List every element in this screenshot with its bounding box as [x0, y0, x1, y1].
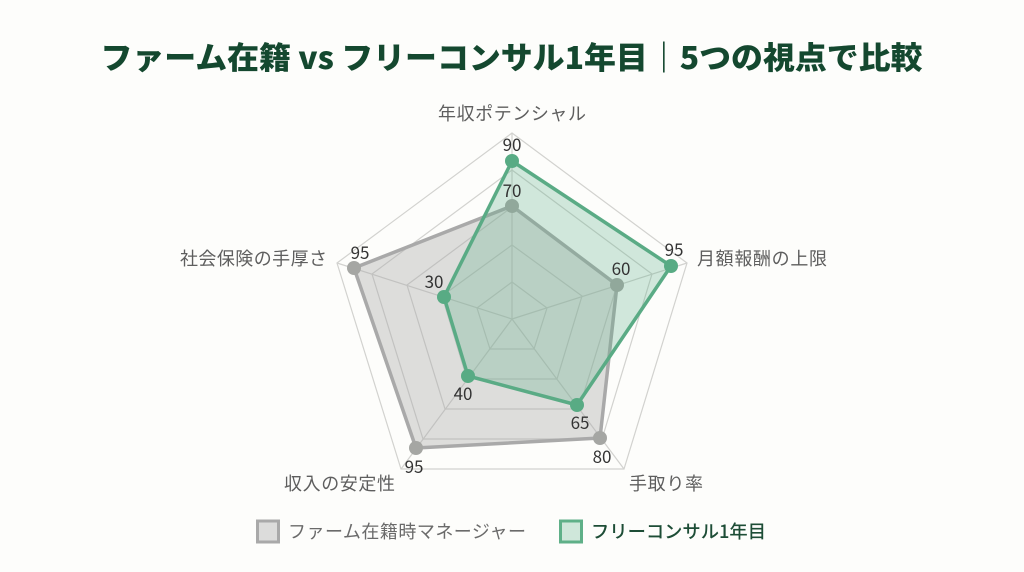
legend item: ファーム在籍時マネージャー: ファーム在籍時マネージャー — [288, 518, 526, 544]
data values: 30 — [425, 268, 443, 293]
legend — [258, 518, 766, 544]
data values: 95 — [405, 453, 423, 478]
legend item: フリーコンサル1年目: フリーコンサル1年目 — [591, 518, 766, 544]
data values — [351, 131, 683, 478]
axis label: 手取り率: 手取り率 — [629, 470, 703, 496]
data values: 95 — [665, 236, 683, 261]
data values: 90 — [503, 131, 521, 156]
axis label: 年収ポテンシャル: 年収ポテンシャル — [438, 100, 586, 126]
axis label: 社会保険の手厚さ: 社会保険の手厚さ — [180, 245, 327, 271]
data values: 95 — [351, 239, 369, 264]
axis label: 月額報酬の上限: 月額報酬の上限 — [697, 245, 827, 271]
series: ファーム在籍時マネージャー — [347, 199, 624, 455]
series: フリーコンサル1年目 — [437, 154, 678, 412]
data values: 65 — [571, 409, 589, 434]
data values: 80 — [593, 443, 611, 468]
radar chart — [337, 131, 687, 478]
radar grid — [337, 133, 687, 469]
data values: 40 — [454, 380, 472, 405]
data values: 70 — [503, 177, 521, 202]
data values: 60 — [612, 255, 630, 280]
title: ファーム在籍 vs フリーコンサル1年目｜5つの視点で比較 — [100, 33, 922, 78]
axis label: 収入の安定性: 収入の安定性 — [284, 470, 395, 496]
